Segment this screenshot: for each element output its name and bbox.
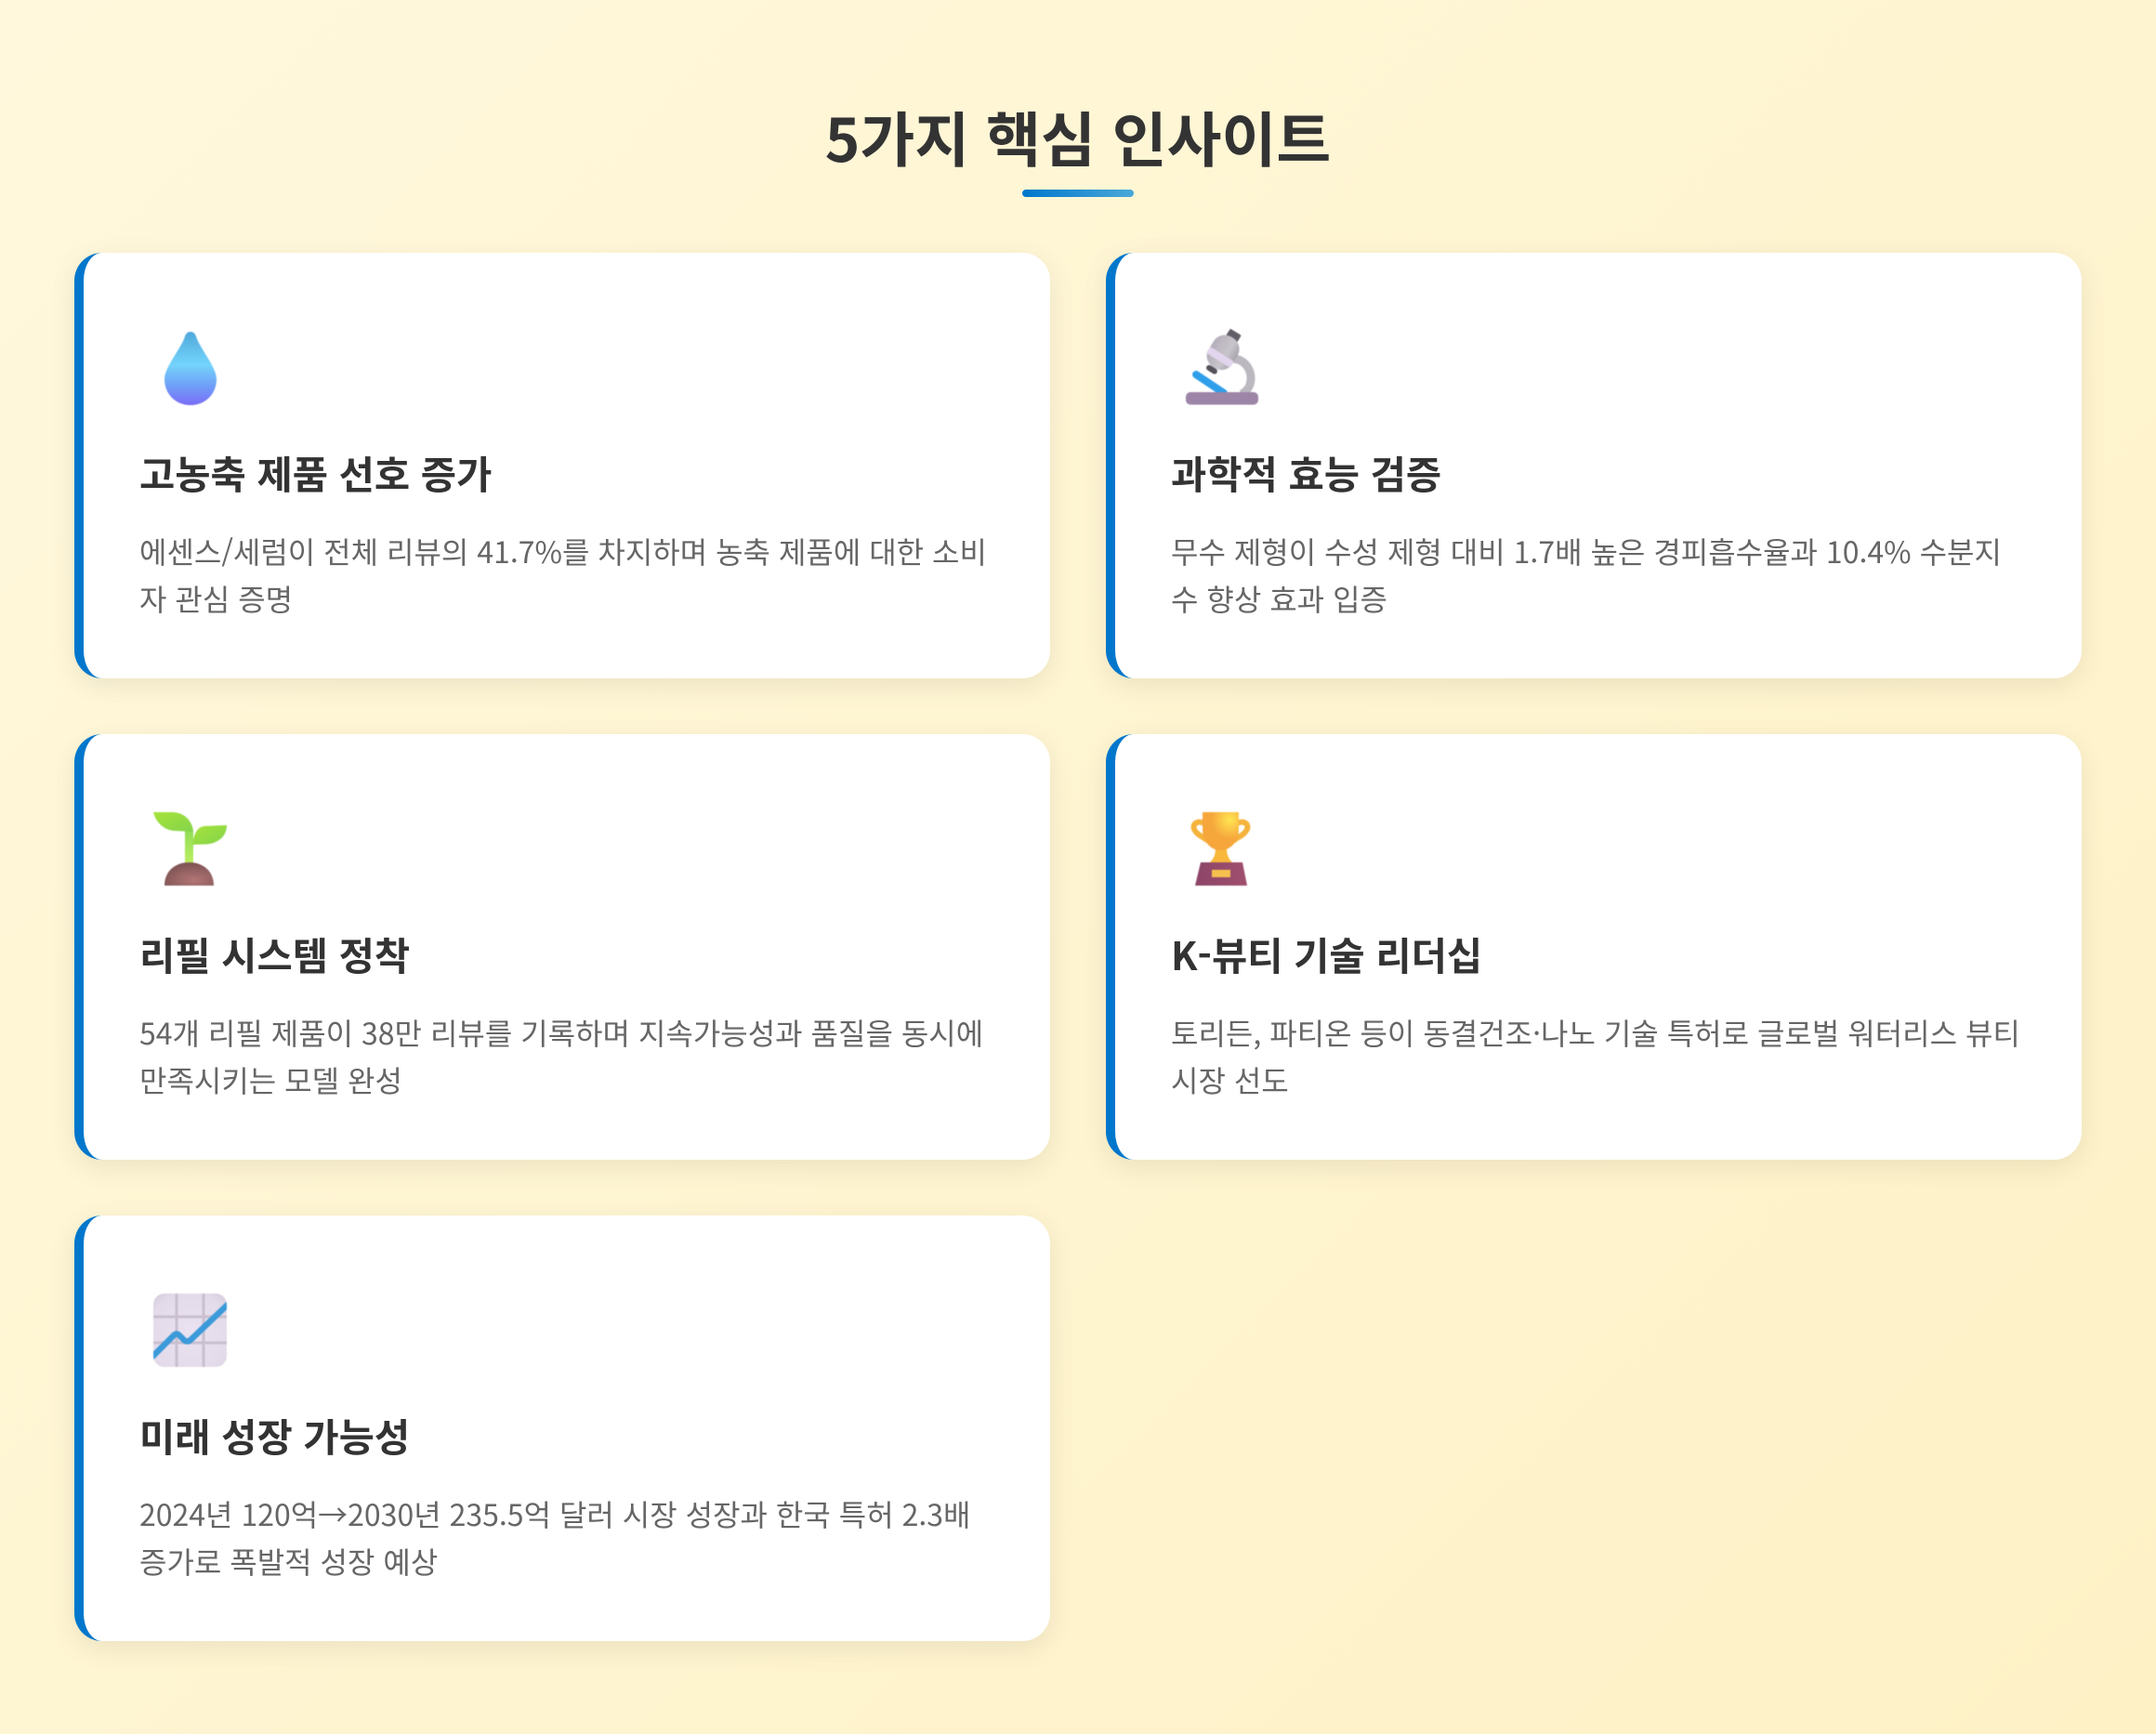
heading: K-뷰티 기술 리더십 xyxy=(1171,926,1482,981)
panel: refill system xyxy=(74,734,1050,1160)
description: 토리든, 파티온 등이 동결건조·나노 기술 특허로 글로벌 워터리스 뷰티 시장 선도 xyxy=(1171,1011,2020,1101)
title underline xyxy=(1022,190,1134,197)
description: 54개 리필 제품이 38만 리뷰를 기록하며 지속가능성과 품질을 동시에 만족시키는 모델 완성 xyxy=(139,1011,983,1101)
icon: sprout xyxy=(152,811,228,887)
panel: future growth xyxy=(74,1215,1050,1641)
description: 2024년 120억→2030년 235.5억 달러 시장 성장과 한국 특허 2.3배 증가로 폭발적 성장 예상 xyxy=(139,1492,970,1583)
icon: microscope xyxy=(1185,329,1259,405)
heading: 미래 성장 가능성 xyxy=(139,1407,410,1463)
description: 무수 제형이 수성 제형 대비 1.7배 높은 경피흡수율과 10.4% 수분지수 향상 효과 입증 xyxy=(1171,530,2002,620)
icon: trophy xyxy=(1190,811,1251,887)
heading: 리필 시스템 정착 xyxy=(139,926,410,981)
panel: high concentrate preference xyxy=(74,253,1050,678)
description: 에센스/세럼이 전체 리뷰의 41.7%를 차지하며 농축 제품에 대한 소비자 관심 증명 xyxy=(139,530,987,620)
heading: 과학적 효능 검증 xyxy=(1171,444,1441,500)
heading: 고농축 제품 선호 증가 xyxy=(139,444,492,500)
panel: K-beauty leadership xyxy=(1106,734,2082,1160)
icon: chart with upward trend xyxy=(152,1294,228,1368)
icon: water drop xyxy=(164,331,217,406)
panel: scientific efficacy xyxy=(1106,253,2082,678)
title: 5가지 핵심 인사이트 xyxy=(825,94,1331,179)
